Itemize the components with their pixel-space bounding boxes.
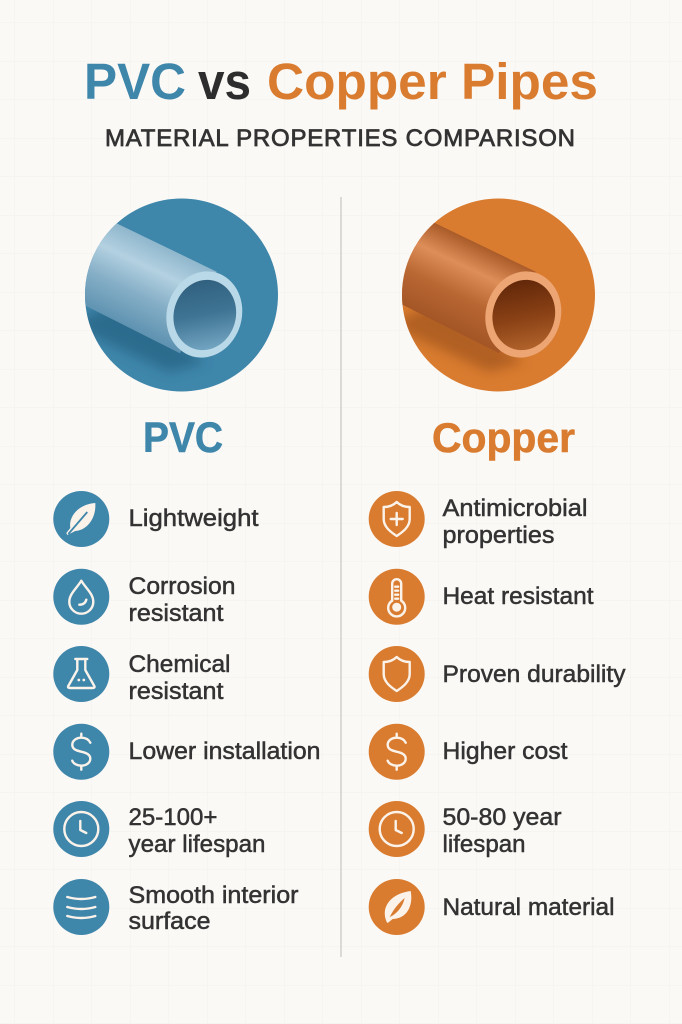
item: Chemical resistant (53, 646, 230, 705)
icon: feather (53, 491, 109, 547)
item: Higher cost: Higher cost (442, 738, 568, 765)
item: Heat resistant: Heat resistant (442, 583, 594, 610)
icon: flask (53, 646, 109, 702)
title: Copper Pipes (267, 53, 598, 110)
item: Smooth interior surface (53, 879, 298, 935)
item: Natural material (369, 879, 614, 935)
item: Lower installation (53, 724, 321, 780)
icon: clock (369, 801, 425, 857)
item: Heat resistant (369, 569, 594, 625)
panel: Copper (369, 196, 626, 935)
icon: shield (369, 646, 425, 702)
icon: waves (53, 879, 109, 935)
icon: thermometer (369, 569, 425, 625)
item: 25-100+ year lifespan: 25-100+ (128, 804, 218, 831)
icon: dollar (53, 724, 109, 780)
item: Higher cost (369, 724, 568, 780)
item: Proven durability: Proven durability (442, 661, 626, 688)
illustration: PVC pipe (85, 198, 278, 392)
item: Lightweight: Lightweight (128, 505, 259, 532)
item: Smooth interior surface: Smooth interior (128, 882, 298, 909)
icon: water drop (53, 569, 109, 625)
item: 25-100+ year lifespan (53, 801, 266, 858)
title: PVC (84, 53, 186, 110)
item: Antimicrobial properties: properties (442, 522, 554, 549)
illustration: copper pipe (402, 198, 595, 392)
item: 50-80 year lifespan: 50-80 year (442, 804, 562, 831)
item: Lower installation: Lower installation (128, 738, 320, 765)
item: 25-100+ year lifespan: year lifespan (128, 831, 266, 858)
item: Smooth interior surface: surface (128, 908, 210, 935)
item: Corrosion resistant: Corrosion (128, 573, 236, 600)
item: Natural material: Natural material (442, 894, 614, 921)
icon: shield with plus (369, 491, 425, 547)
icon: dollar (369, 724, 425, 780)
title: vs (198, 53, 251, 110)
item: Corrosion resistant: resistant (128, 600, 224, 627)
item: Antimicrobial properties: Antimicrobial (442, 495, 588, 522)
heading: PVC: PVC (143, 414, 223, 462)
subtitle: MATERIAL PROPERTIES COMPARISON (105, 125, 575, 152)
icon: clock (53, 801, 109, 857)
item: 50-80 year lifespan: lifespan (442, 831, 526, 858)
item: Proven durability (369, 646, 626, 702)
heading: Copper: Copper (432, 414, 575, 461)
item: Chemical resistant: Chemical (128, 651, 230, 678)
item: Corrosion resistant (53, 569, 236, 627)
icon: leaf (369, 879, 425, 935)
item: 50-80 year lifespan (369, 801, 562, 858)
item: Chemical resistant: resistant (128, 678, 224, 705)
item: Lightweight (53, 491, 259, 547)
panel: PVC (53, 196, 321, 935)
item: Antimicrobial properties (369, 491, 588, 549)
